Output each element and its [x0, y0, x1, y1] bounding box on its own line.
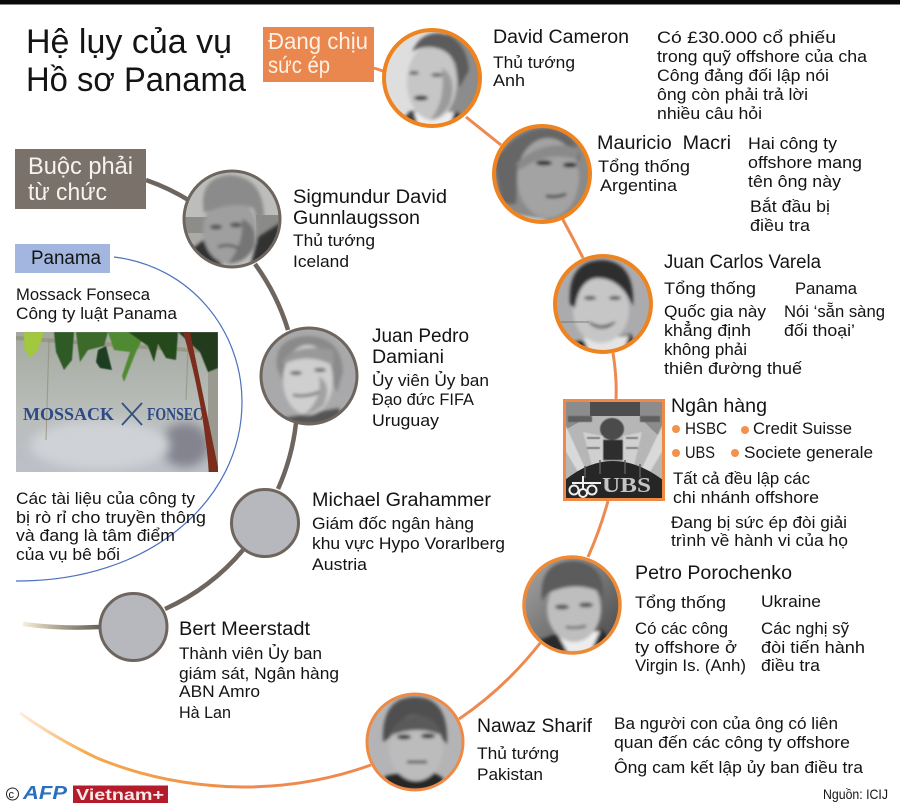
text: Nawaz Sharif: Pakistan	[477, 765, 543, 784]
text: Varela note: đối thoại’	[784, 321, 855, 340]
text: Juan Pedro Damiani: Damiani	[372, 347, 444, 368]
text: Juan Carlos Varela: Juan Carlos Varela	[664, 252, 821, 273]
portrait: David Cameron	[384, 30, 482, 126]
Panama label	[15, 244, 110, 273]
text: Porochenko note	[635, 619, 865, 675]
grey timeline arc	[23, 180, 296, 628]
text: Bert Meerstadt: Hà Lan	[179, 703, 231, 722]
text: Porochenko note: Các nghị sỹ	[761, 619, 849, 638]
logos: AFP and Vietnam+: Vietnam+	[76, 787, 164, 804]
text: banks: Đang bị sức ép đòi giải	[671, 513, 847, 532]
text: Michael Grahammer: khu vực Hypo Vorarlberg	[312, 534, 505, 553]
description: của vụ bê bối	[16, 545, 120, 564]
text: Sigmundur David Gunnlaugsson: Sigmundur David	[293, 187, 447, 208]
text: Juan Pedro Damiani	[372, 326, 489, 430]
title: Hệ lụy của vụ	[26, 23, 232, 61]
text: banks: Ngân hàng	[671, 396, 767, 417]
orange timeline arc	[20, 68, 616, 787]
text: Varela note	[664, 302, 885, 378]
text: Varela note: không phải	[664, 340, 747, 359]
logos: AFP and Vietnam+: c	[8, 789, 14, 801]
text: Sharif note: quan đến các công ty offshore	[614, 733, 850, 752]
text: David Cameron: Thủ tướng	[493, 53, 575, 72]
text: Michael Grahammer: Austria	[312, 555, 368, 574]
company name	[16, 285, 178, 323]
bank list: Societe generale	[744, 443, 873, 462]
text: Juan Pedro Damiani: Juan Pedro	[372, 326, 469, 347]
text: Mauricio Macri	[597, 133, 731, 195]
text: banks: chi nhánh offshore	[673, 488, 819, 507]
description	[16, 489, 206, 564]
text: Varela note: khẳng định	[664, 321, 751, 340]
text: Varela note: Quốc gia này	[664, 302, 766, 321]
logos: AFP and Vietnam+: AFP	[22, 783, 68, 803]
text: Porochenko note: Có các công	[635, 619, 728, 638]
label: under pressure: sức ép	[268, 52, 330, 78]
portrait: Nawaz Sharif	[367, 694, 463, 790]
text: Juan Carlos Varela	[664, 252, 858, 298]
photo: Mossack Fonseca sign: MOSSACK	[23, 404, 114, 424]
description: và đang là tâm điểm	[16, 526, 175, 545]
text: Macri note: Hai công ty	[748, 134, 838, 153]
label: forced to resign: từ chức	[28, 179, 107, 206]
bank list: UBS	[685, 443, 715, 462]
photo: UBS building	[564, 400, 664, 500]
title	[26, 23, 246, 99]
text: Petro Porochenko: Tổng thống	[635, 593, 726, 612]
text: Cameron note	[657, 28, 868, 123]
text: Nawaz Sharif: Thủ tướng	[477, 744, 559, 763]
photo: Mossack Fonseca sign: FONSEC	[147, 404, 203, 424]
label: under pressure	[263, 27, 374, 82]
text: Mauricio Macri: Tổng thống	[598, 157, 690, 176]
text: Bert Meerstadt: Thành viên Ủy ban	[179, 644, 322, 663]
photo: UBS building: UBS	[602, 473, 651, 497]
text: Sigmundur David Gunnlaugsson: Gunnlaugsson	[293, 208, 420, 229]
text: Macri note: offshore mang	[748, 153, 862, 172]
text: Michael Grahammer: Michael Grahammer	[312, 490, 492, 511]
text: Varela note: Nói ‘sẵn sàng	[784, 302, 885, 321]
text: David Cameron	[493, 27, 629, 90]
label: under pressure: Đang chịu	[268, 28, 368, 54]
text: Porochenko note: điều tra	[761, 656, 821, 675]
text: Porochenko note: ty offshore ở	[635, 638, 737, 657]
portrait: Mauricio Macri	[494, 126, 590, 224]
bank list	[672, 419, 873, 462]
text: David Cameron: David Cameron	[493, 27, 629, 48]
text: banks	[671, 396, 873, 550]
portrait: Juan Carlos Varela	[555, 256, 651, 352]
text: Sigmundur David Gunnlaugsson	[293, 187, 447, 271]
text: Petro Porochenko: Ukraine	[761, 592, 821, 611]
bank list: HSBC	[685, 419, 727, 438]
text: Cameron note: trong quỹ offshore của cha	[657, 47, 868, 66]
text: Michael Grahammer	[312, 490, 505, 574]
text: Bert Meerstadt: Bert Meerstadt	[179, 619, 311, 640]
text: Macri note: Bắt đầu bị	[750, 197, 830, 216]
text: Porochenko note: Virgin Is. (Anh)	[635, 656, 746, 675]
Panama label: Panama	[31, 248, 101, 269]
text: Sigmundur David Gunnlaugsson: Iceland	[293, 252, 349, 271]
text: Juan Pedro Damiani: Uruguay	[372, 411, 440, 430]
portrait: Gunnlaugsson	[184, 171, 280, 267]
text: Nawaz Sharif	[477, 716, 593, 784]
text: Varela note: thiên đường thuế	[664, 359, 803, 378]
text: Juan Carlos Varela: Tổng thống	[664, 279, 756, 298]
text: Cameron note: nhiều câu hỏi	[657, 104, 762, 123]
text: Juan Carlos Varela: Panama	[795, 279, 858, 298]
text: Petro Porochenko	[635, 563, 821, 612]
text: Mauricio Macri: Mauricio Macri	[597, 133, 731, 154]
title: Hồ sơ Panama	[26, 61, 246, 99]
text: Michael Grahammer: Giám đốc ngân hàng	[312, 514, 474, 533]
portrait: Damiani	[261, 328, 357, 424]
label: forced to resign: Buộc phải	[28, 153, 133, 180]
text: Macri note: điều tra	[750, 216, 811, 235]
text: Cameron note: ông còn phải trả lời	[657, 85, 808, 104]
text: Juan Pedro Damiani: Ủy viên Ủy ban	[372, 371, 489, 390]
logos: AFP and Vietnam+	[6, 783, 168, 804]
text: banks: Tất cả đều lập các	[673, 469, 810, 488]
company name: Mossack Fonseca	[16, 285, 151, 304]
text: Porochenko note: đòi tiến hành	[761, 638, 865, 657]
text: Sigmundur David Gunnlaugsson: Thủ tướng	[293, 231, 375, 250]
portrait: Bert Meerstadt placeholder	[100, 594, 167, 660]
blue Panama arc	[16, 257, 242, 581]
label: forced to resign	[15, 149, 146, 209]
text: Sharif note: Ba người con của ông có liên	[614, 714, 838, 733]
text: Cameron note: Có £30.000 cổ phiếu	[657, 28, 836, 47]
text: Bert Meerstadt: giám sát, Ngân hàng	[179, 664, 339, 683]
top bar	[0, 0, 900, 4]
text: Macri note	[748, 134, 862, 235]
text: Bert Meerstadt	[179, 619, 339, 722]
text: Bert Meerstadt: ABN Amro	[179, 682, 260, 701]
text: Sharif note	[614, 714, 864, 777]
description: Các tài liệu của công ty	[16, 489, 196, 508]
description: bị rò rỉ cho truyền thông	[16, 508, 206, 527]
text: Mauricio Macri: Argentina	[600, 176, 678, 195]
text: Nawaz Sharif: Nawaz Sharif	[477, 716, 593, 737]
text: Sharif note: Ông cam kết lập ủy ban điều tra	[614, 758, 864, 777]
company name: Công ty luật Panama	[16, 304, 178, 323]
text: Petro Porochenko: Petro Porochenko	[635, 563, 792, 584]
text: Macri note: tên ông này	[748, 172, 842, 191]
photo: Mossack Fonseca sign	[16, 332, 219, 472]
portrait: Michael Grahammer placeholder	[232, 490, 298, 556]
source: Nguồn: ICIJ	[823, 786, 888, 802]
text: Cameron note: Công đảng đối lập nói	[657, 66, 829, 85]
panel: Panama	[15, 244, 219, 564]
text: Juan Pedro Damiani: Đạo đức FIFA	[372, 390, 475, 409]
text: banks: trình về hành vi của họ	[671, 531, 848, 550]
portrait: Petro Porochenko	[524, 557, 620, 653]
text: David Cameron: Anh	[493, 71, 525, 90]
bank list: Credit Suisse	[753, 419, 852, 438]
